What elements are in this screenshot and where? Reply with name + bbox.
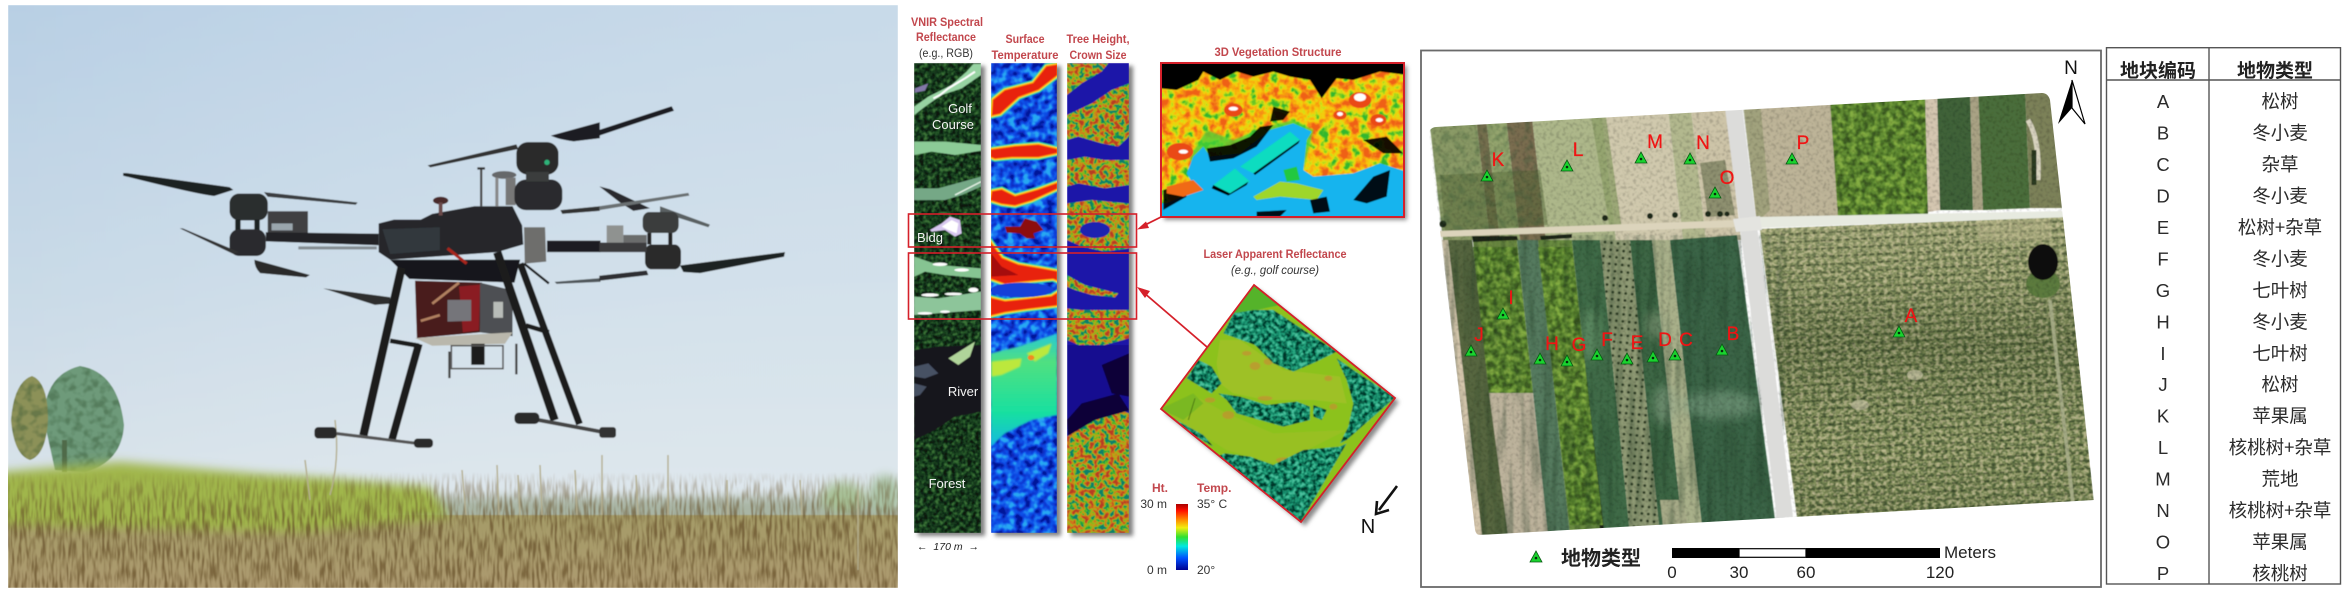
sensor payload <box>415 281 513 346</box>
point-cloud image <box>1160 62 1407 218</box>
column heading: tree height <box>1066 32 1130 62</box>
marker letters: A <box>1905 306 1918 327</box>
landing gear <box>337 252 601 443</box>
reflectance image <box>1155 280 1400 525</box>
marker letters: I <box>1508 288 1514 309</box>
marker letters: F <box>1601 330 1613 351</box>
GPS antennas <box>433 167 516 215</box>
panel: study-area map frame <box>1421 50 2105 587</box>
north arrow of laser image: N <box>1361 516 1375 538</box>
marker letters: P <box>1797 133 1809 154</box>
strip labels: Bldg <box>917 230 943 245</box>
left bracket <box>268 211 308 233</box>
marker letters: N <box>1696 133 1710 154</box>
panel: laser apparent reflectance <box>1137 247 1400 538</box>
marker letters: K <box>1492 150 1505 171</box>
column heading: tree height: Crown Size <box>1070 48 1127 62</box>
landing feet <box>314 413 539 448</box>
far background tree line <box>430 475 901 525</box>
weed stalks <box>305 420 858 570</box>
legend titles <box>1152 481 1231 495</box>
column: plot codes: O <box>2156 532 2170 553</box>
column: plot codes: B <box>2157 122 2169 144</box>
colour bar <box>1176 504 1188 570</box>
marker letters: O <box>1720 168 1734 189</box>
wiring under the body <box>390 260 520 283</box>
left arm <box>266 232 379 249</box>
legend values <box>1140 497 1227 577</box>
brown foreground grass <box>8 515 898 588</box>
arrow to building row <box>1137 217 1161 230</box>
legend titles: Ht. <box>1152 481 1168 495</box>
strip labels: Course <box>932 117 974 132</box>
right foot end <box>599 427 616 438</box>
aerial orthophoto <box>1425 88 2105 540</box>
column: land-cover types: 七叶树 <box>2252 340 2308 366</box>
marker letters: E <box>1631 333 1643 354</box>
column heading: tree height: Tree Height, <box>1066 32 1130 46</box>
column: land-cover types: 苹果属 <box>2252 403 2308 429</box>
scale bar: 30 <box>1730 563 1748 582</box>
scale bar: Meters <box>1944 543 1996 562</box>
column heading: VNIR: VNIR Spectral <box>911 15 983 29</box>
column: land-cover types: 核桃树 <box>2252 560 2308 586</box>
column: plot codes: A <box>2157 91 2170 112</box>
column: plot codes: G <box>2156 280 2170 301</box>
column: land-cover types: 苹果属 <box>2252 529 2308 555</box>
marker letters: H <box>1545 334 1559 355</box>
panel border <box>1161 63 1404 217</box>
scale bar: 60 <box>1797 563 1815 582</box>
column heading: temperature: Temperature <box>992 48 1059 62</box>
column: plot codes: P <box>2157 563 2169 584</box>
field A <box>1755 215 2100 520</box>
column: land-cover types: 荒地 <box>2261 466 2299 492</box>
heading: 3D Vegetation Structure <box>1214 45 1342 59</box>
legend: height and temperature colour bar <box>1140 481 1231 577</box>
heading <box>1204 247 1347 277</box>
table header <box>2120 56 2313 83</box>
column: plot codes: N <box>2156 500 2170 521</box>
north arrow: N <box>2064 58 2078 79</box>
lone tree and its shadow <box>2026 244 2060 298</box>
legend values: 0 m <box>1147 563 1167 577</box>
marker centre dots <box>1470 158 1900 363</box>
column: land-cover types: 松树+杂草 <box>2238 214 2322 240</box>
marker letters <box>1474 132 1918 356</box>
grass texture <box>8 472 898 588</box>
left propellers and motors <box>123 173 390 305</box>
marker letters: B <box>1727 324 1739 345</box>
column: land-cover types: 冬小麦 <box>2252 308 2308 334</box>
column: plot codes: J <box>2158 374 2168 395</box>
panel: UAV drone photo <box>0 5 901 588</box>
column: plot codes: E <box>2157 217 2169 238</box>
lower-left plots <box>1442 234 1777 535</box>
column heading: VNIR: Reflectance <box>916 30 976 44</box>
column heading: VNIR <box>911 15 983 60</box>
column: plot codes: H <box>2156 311 2170 332</box>
green shrub band <box>0 462 450 532</box>
drone body <box>379 206 523 260</box>
column: plot codes: L <box>2158 437 2168 458</box>
column: land-cover types: 冬小麦 <box>2252 245 2308 271</box>
marker letters: J <box>1474 325 1484 346</box>
land-cover table <box>2106 48 2340 586</box>
panel shadow <box>1164 66 1407 220</box>
panel: spectral, temperature and height strips <box>908 15 1136 553</box>
column: land-cover types: 核桃树+杂草 <box>2229 434 2331 460</box>
heading: Laser Apparent Reflectance <box>1204 247 1347 261</box>
lower camera frame <box>449 344 516 378</box>
column: land-cover types: 冬小麦 <box>2252 120 2308 146</box>
marker letters: G <box>1572 335 1586 356</box>
legend values: 20° <box>1197 563 1215 577</box>
diamond shadow <box>1165 289 1399 526</box>
upper-left plots <box>1427 100 1741 240</box>
scale note 170 m: ← 170 m → <box>917 541 979 553</box>
callout boxes on strips <box>908 214 1136 319</box>
marker letters: L <box>1573 140 1583 161</box>
column: land-cover types: 杂草 <box>2261 151 2299 177</box>
arrow to golf course row <box>1137 287 1207 347</box>
strip: VNIR reflectance <box>914 63 981 533</box>
strip: surface temperature <box>990 63 1057 533</box>
strip labels: River <box>948 384 979 399</box>
column: land-cover types: 七叶树 <box>2252 277 2308 303</box>
scale bar: 120 <box>1926 563 1954 582</box>
marker letters: M <box>1647 132 1663 153</box>
drone right half <box>599 106 785 438</box>
column: plot codes: K <box>2157 406 2170 427</box>
panel: 3D vegetation structure <box>1137 45 1407 230</box>
table header: 地物类型 <box>2237 56 2313 83</box>
column: plot codes <box>2155 91 2171 584</box>
heading: (e.g., golf course) <box>1231 265 1319 277</box>
marker letters: C <box>1679 330 1693 351</box>
strip: tree height <box>1067 63 1129 533</box>
map legend: 地物类型 <box>1561 542 1641 571</box>
rear propellers <box>599 186 785 281</box>
column: plot codes: I <box>2160 343 2166 364</box>
strip labels <box>917 101 979 491</box>
strip labels: Forest <box>929 476 966 491</box>
side box <box>524 227 546 264</box>
diamond border <box>1161 285 1395 522</box>
upper-right plots <box>1742 88 2066 226</box>
canopy and noise textures <box>1425 90 2105 540</box>
column: land-cover types: 核桃树+杂草 <box>2229 497 2331 523</box>
column heading: temperature: Surface <box>1006 32 1045 46</box>
column heading: VNIR: (e.g., RGB) <box>919 46 973 60</box>
column: plot codes: F <box>2157 248 2169 269</box>
legend values: 30 m <box>1140 497 1167 511</box>
photo sky <box>8 5 898 515</box>
column: land-cover types: 松树 <box>2261 371 2299 397</box>
column: land-cover types: 松树 <box>2261 88 2299 114</box>
north arrow <box>2058 58 2085 124</box>
upper-right motor stack and propeller <box>428 122 600 214</box>
column heading: temperature <box>992 32 1059 62</box>
table header: 地块编码 <box>2120 56 2196 83</box>
strip labels: Golf <box>948 101 972 116</box>
scale bar <box>1667 543 1996 582</box>
trees on the left <box>10 366 124 472</box>
marker letters: D <box>1658 330 1672 351</box>
rear motors <box>643 212 681 269</box>
column: land-cover types: 冬小麦 <box>2252 182 2308 208</box>
rear arm and box <box>599 225 647 252</box>
right arm <box>547 241 601 252</box>
column: land-cover types <box>2229 88 2331 586</box>
legend titles: Temp. <box>1197 481 1231 495</box>
strip shadows <box>918 66 1133 536</box>
map border <box>1421 50 2101 587</box>
column: plot codes: C <box>2156 154 2170 175</box>
drone left half <box>123 122 601 448</box>
field roads <box>1438 106 2070 518</box>
table frame <box>2106 48 2340 584</box>
north arrow of laser image <box>1361 486 1397 538</box>
upper right blade <box>599 106 674 136</box>
sample markers <box>1465 152 1905 366</box>
legend values: 35° C <box>1197 497 1227 511</box>
scale bar: 0 <box>1667 563 1677 582</box>
column: plot codes: D <box>2156 185 2170 206</box>
column: plot codes: M <box>2155 469 2171 490</box>
